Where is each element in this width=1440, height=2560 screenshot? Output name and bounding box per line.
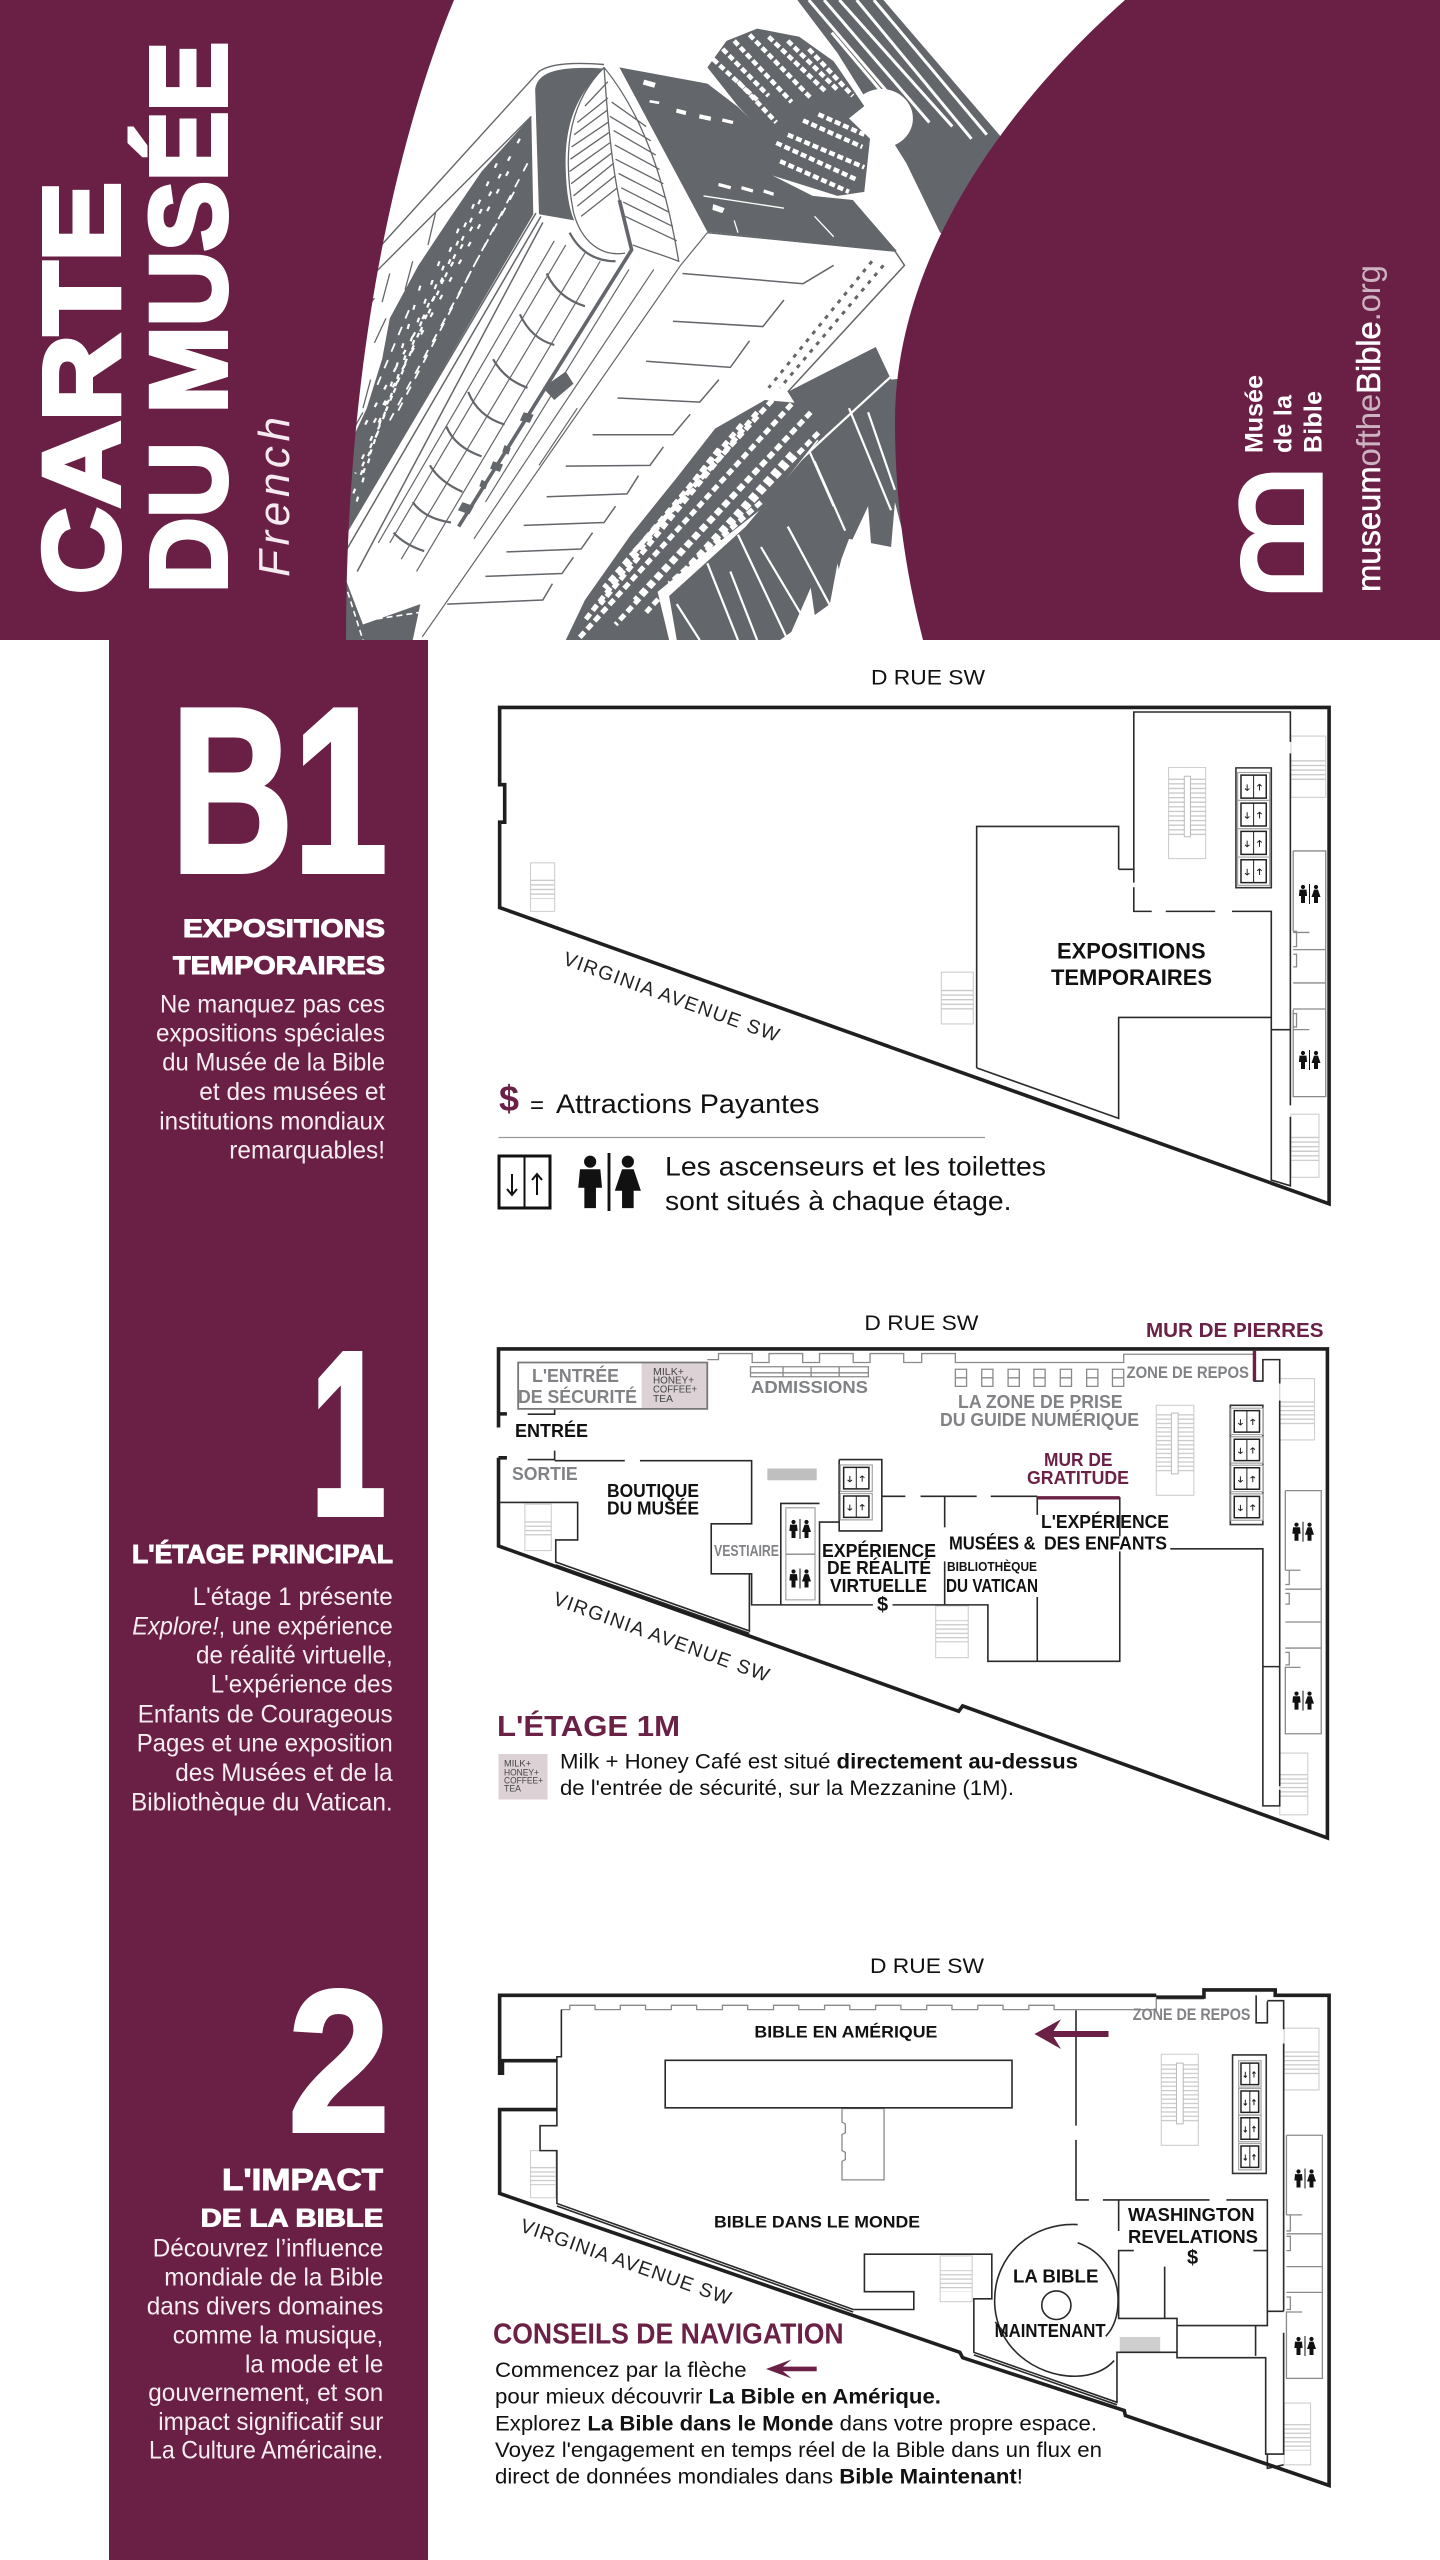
arrow: tip marker xyxy=(766,2360,817,2378)
floor 1 description xyxy=(131,1583,393,1816)
mezzanine note: Milk + Honey Café est situé directement au-dessus xyxy=(560,1750,1078,1773)
illustration: museum building xyxy=(340,0,1010,640)
panel: floor plan 2 xyxy=(500,1955,1329,2485)
street label: D RUE SW: D RUE SW xyxy=(864,1312,979,1335)
floor B1 description xyxy=(156,991,385,1165)
room label: Washington Revelations xyxy=(1128,2205,1258,2269)
logo text: Musée de la Bible: Musée xyxy=(1241,375,1269,453)
café label: HONEY+ xyxy=(653,1374,694,1386)
navigation tips: Voyez l'engagement en temps réel de la Bible dans un flux en xyxy=(495,2439,1102,2462)
legend: paid attractions: $ xyxy=(499,1078,519,1119)
room label: VR experience: EXPÉRIENCE xyxy=(822,1540,936,1561)
floor 1 description: L'étage 1 présente xyxy=(193,1583,393,1611)
floor B1 description: Ne manquez pas ces xyxy=(160,991,385,1019)
floor B1 description: expositions spéciales xyxy=(156,1020,385,1048)
floor B1 heading xyxy=(173,915,385,980)
street label: Virginia Avenue: VIRGINIA AVENUE SW xyxy=(550,1588,773,1687)
navigation tips: Commencez par la flèche xyxy=(495,2359,747,2382)
street label: Virginia Avenue: VIRGINIA AVENUE SW xyxy=(517,2215,735,2310)
website address: museumoftheBible.org xyxy=(1350,265,1387,592)
title: CARTE: CARTE xyxy=(20,182,142,594)
room label: Washington Revelations: $ xyxy=(1187,2247,1198,2269)
room label: museum shop xyxy=(607,1481,699,1519)
floor 2 description: dans divers domaines xyxy=(147,2292,383,2320)
café label: MILK+ xyxy=(653,1366,684,1378)
floor 2 label: 2 xyxy=(288,1948,390,2174)
plan 1 walls and rooms xyxy=(499,1349,1327,1838)
floor B1 description: remarquables! xyxy=(229,1137,385,1165)
navigation tips xyxy=(495,2359,1102,2488)
floor 1 description: L'expérience des xyxy=(211,1671,393,1699)
floor B1 description: et des musées et xyxy=(199,1078,385,1106)
floor B1 description: du Musée de la Bible xyxy=(162,1049,385,1077)
room label: rest zone: ZONE DE REPOS xyxy=(1126,1363,1249,1382)
legend: paid attractions: Attractions Payantes xyxy=(556,1089,820,1119)
callout: Mur de Gratitude: GRATITUDE xyxy=(1027,1468,1129,1488)
room label: expositions temporaires xyxy=(1051,938,1212,990)
floor 2 description: comme la musique, xyxy=(173,2321,383,2349)
subtitle: French: French xyxy=(250,417,299,577)
room label: children's experience: DES ENFANTS xyxy=(1044,1534,1167,1554)
street label: D RUE SW: D RUE SW xyxy=(871,666,985,689)
floor 1 description: Explore!, une expérience xyxy=(132,1612,393,1640)
floor 2 description: gouvernement, et son xyxy=(148,2379,383,2407)
floor 2 description xyxy=(147,2235,383,2464)
logo text: Musée de la Bible: Bible xyxy=(1300,391,1328,453)
legend: paid attractions: = xyxy=(530,1092,544,1119)
logo text: Musée de la Bible: de la xyxy=(1270,394,1298,453)
floor 1 description: Enfants de Courageous xyxy=(138,1700,393,1728)
floor 2 description: Découvrez l’influence xyxy=(153,2235,383,2263)
floor B1 heading: EXPOSITIONS xyxy=(183,915,385,943)
restroom icons B1 xyxy=(1299,884,1320,1070)
café swatch: TEA xyxy=(504,1784,522,1795)
panel: floor plan B1 xyxy=(500,666,1329,1204)
room label: children's experience: L'EXPÉRIENCE xyxy=(1041,1511,1169,1532)
logo: museum monogram xyxy=(1238,473,1323,592)
title: DU MUSÉE: DU MUSÉE xyxy=(128,42,248,593)
floor 2 description: La Culture Américaine. xyxy=(149,2436,383,2464)
floor 2 description: mondiale de la Bible xyxy=(164,2264,383,2292)
panel: floor plan 1 xyxy=(499,1312,1327,1838)
room label: VR experience: VIRTUELLE xyxy=(830,1576,927,1596)
café swatch xyxy=(498,1754,548,1800)
floor B1 label: B1 xyxy=(171,658,388,922)
callout: Mur de Gratitude: MUR DE xyxy=(1044,1450,1112,1470)
mezzanine note xyxy=(560,1750,1078,1800)
callout: Mur de Gratitude xyxy=(1027,1450,1129,1488)
room label: children's experience xyxy=(1041,1511,1169,1554)
callout: Mur de Pierres: MUR DE PIERRES xyxy=(1146,1320,1324,1342)
room label: digital guide zone: LA ZONE DE PRISE xyxy=(958,1392,1123,1412)
plan 2 walls and rooms xyxy=(500,1990,1329,2485)
floor 1 description: des Musées et de la xyxy=(175,1759,393,1787)
legend: elevators icon xyxy=(499,1156,550,1208)
floor B1 description: institutions mondiaux xyxy=(159,1107,385,1135)
room label: Washington Revelations: REVELATIONS xyxy=(1128,2227,1258,2247)
café swatch: HONEY+ xyxy=(504,1768,539,1778)
room label: security entrance: DE SÉCURITÉ xyxy=(518,1386,637,1407)
street label: D RUE SW: D RUE SW xyxy=(870,1955,984,1978)
room label: security entrance: L'ENTRÉE xyxy=(532,1365,619,1386)
café swatch: COFFEE+ xyxy=(504,1775,543,1786)
room label: expositions temporaires: EXPOSITIONS xyxy=(1057,938,1206,964)
floor 1 description: de réalité virtuelle, xyxy=(196,1641,393,1669)
room label: Vatican museums and library: DU VATICAN xyxy=(946,1576,1038,1596)
legend text: Les ascenseurs et les toilettes xyxy=(665,1152,1046,1182)
room label: admissions: ADMISSIONS xyxy=(751,1377,868,1397)
logo text: Musée de la Bible xyxy=(1241,375,1328,453)
room label: museum shop: BOUTIQUE xyxy=(607,1481,699,1501)
floor 2 heading: DE LA BIBLE xyxy=(201,2205,383,2233)
floor 1 heading: L'ÉTAGE PRINCIPAL xyxy=(132,1539,393,1569)
room label: Bible dans le monde: BIBLE DANS LE MONDE xyxy=(714,2212,920,2231)
room label: La Bible maintenant: MAINTENANT xyxy=(995,2321,1106,2341)
room label: security entrance xyxy=(518,1365,637,1407)
header band: left maroon title panel xyxy=(0,0,454,640)
navigation tips: direct de données mondiales dans Bible Maintenant ! xyxy=(495,2465,1023,2488)
heading: conseils de navigation: CONSEILS DE NAVIGATION xyxy=(493,2318,844,2350)
legend: restrooms icon xyxy=(578,1153,641,1211)
room label: Vatican museums and library xyxy=(946,1532,1038,1596)
restroom icons floor 2 xyxy=(1294,2168,1316,2356)
room label: museum shop: DU MUSÉE xyxy=(607,1498,699,1519)
legend text: sont situés à chaque étage. xyxy=(665,1186,1012,1216)
room label: Washington Revelations: WASHINGTON xyxy=(1128,2205,1254,2225)
plan B1 walls and rooms xyxy=(500,707,1329,1204)
legend: paid attractions xyxy=(499,1078,820,1119)
floor 2 heading: L'IMPACT xyxy=(222,2162,383,2197)
room label: expositions temporaires: TEMPORAIRES xyxy=(1051,965,1212,990)
room label: entrance: ENTRÉE xyxy=(515,1420,588,1441)
navigation tips: Explorez La Bible dans le Monde dans votre propre espace. xyxy=(495,2412,1097,2436)
room label: Bible en Amérique: BIBLE EN AMÉRIQUE xyxy=(754,2022,937,2042)
café label: COFFEE+ xyxy=(653,1384,697,1396)
room label: La Bible maintenant: LA BIBLE xyxy=(1013,2267,1098,2287)
room label: Vatican museums and library: BIBLIOTHÈQUE xyxy=(947,1559,1037,1574)
room label: rest zone: ZONE DE REPOS xyxy=(1133,2005,1250,2024)
café label: TEA xyxy=(653,1393,673,1405)
café label xyxy=(653,1366,697,1405)
room label: digital guide zone: DU GUIDE NUMÉRIQUE xyxy=(940,1409,1139,1430)
header band: right maroon logo panel xyxy=(895,0,1440,640)
café swatch: MILK+ xyxy=(504,1759,531,1770)
street label: Virginia Avenue: VIRGINIA AVENUE SW xyxy=(560,948,783,1047)
floor 2 description: impact significatif sur xyxy=(158,2408,383,2436)
floor 2 description: la mode et le xyxy=(245,2350,383,2378)
mezzanine note: de l'entrée de sécurité, sur la Mezzanine (1M). xyxy=(560,1777,1014,1800)
floor 1 description: Pages et une exposition xyxy=(137,1730,393,1758)
arrow: start here xyxy=(1034,2019,1108,2049)
room label: VR experience xyxy=(822,1540,936,1616)
floor 1 label: 1 xyxy=(310,1302,386,1564)
legend text xyxy=(665,1152,1046,1216)
heading: L'étage 1M: L'ÉTAGE 1M xyxy=(497,1709,680,1743)
floor B1 heading: TEMPORAIRES xyxy=(173,952,385,980)
floor 1 description: Bibliothèque du Vatican. xyxy=(131,1788,393,1816)
room label: La Bible maintenant xyxy=(995,2267,1106,2341)
room label: exit: SORTIE xyxy=(512,1464,578,1484)
room label: VR experience: DE RÉALITÉ xyxy=(827,1557,931,1578)
room label: cloakroom: VESTIAIRE xyxy=(714,1543,779,1560)
floor 2 heading xyxy=(201,2162,383,2233)
room label: digital guide zone xyxy=(940,1392,1139,1430)
room label: Vatican museums and library: MUSÉES & xyxy=(949,1532,1036,1554)
panel: left maroon column xyxy=(109,640,428,2560)
navigation tips: pour mieux découvrir La Bible en Amérique. xyxy=(495,2385,941,2408)
restroom icons floor 1 xyxy=(789,1519,1314,1711)
room label: VR experience: $ xyxy=(877,1594,888,1616)
